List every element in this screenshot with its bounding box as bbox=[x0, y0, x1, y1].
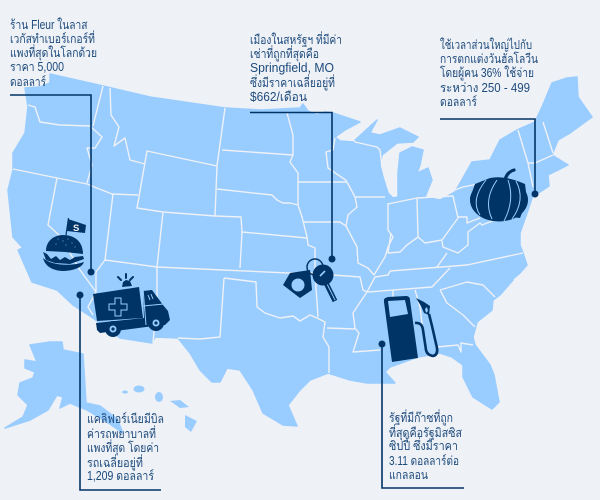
text: halloween fact: ระหว่าง 250 - 499 bbox=[440, 81, 530, 95]
text: gas fact: 3.11 ดอลลาร์ต่อ bbox=[389, 454, 459, 468]
text: halloween fact: การตกแต่งวันฮัลโลวีน bbox=[440, 51, 538, 66]
text: halloween fact: ใช้เวลาส่วนใหญ่ไปกับ bbox=[440, 38, 532, 52]
text: rent fact: Springfield, MO bbox=[250, 61, 334, 75]
text: burger fact: ดอลลาร์ bbox=[10, 75, 46, 89]
text: burger fact: เวกัสทำเบอร์เกอร์ที่ bbox=[10, 30, 95, 46]
text: ambulance fact: แคลิฟอร์เนียมีบิล bbox=[87, 412, 164, 426]
text: rent fact: เช่าที่ถูกที่สุดคือ bbox=[250, 45, 319, 62]
text: burger fact: ราคา 5,000 bbox=[10, 60, 64, 74]
alaska bbox=[5, 342, 123, 433]
text: burger fact: แพงที่สุดในโลกด้วย bbox=[10, 44, 97, 61]
text: burger fact: ร้าน Fleur ในลาส bbox=[10, 18, 88, 32]
text: rent fact: $662/เดือน bbox=[250, 90, 307, 104]
text: rent fact: เมืองในสหรัฐฯ ที่มีค่า bbox=[250, 31, 342, 47]
text: gas fact: รัฐที่มีก๊าซที่ถูก bbox=[389, 409, 453, 426]
text: gas fact: แกลลอน bbox=[389, 468, 428, 482]
text: gas fact: ที่สุดคือรัฐมิสซิส bbox=[389, 424, 462, 441]
text: ambulance fact: ค่ารถพยาบาลที่ bbox=[87, 425, 156, 441]
hawaii bbox=[122, 386, 197, 432]
text: ambulance fact: รถเฉลี่ยอยู่ที่ bbox=[87, 454, 143, 471]
text: rent fact: ซึ่งมีราคาเฉลี่ยอยู่ที่ bbox=[250, 74, 335, 91]
text: halloween fact: โดยผู้คน 36% ใช้จ่าย bbox=[440, 65, 534, 81]
text: ambulance fact: 1,209 ดอลลาร์ bbox=[87, 469, 154, 483]
icon: burger: S bbox=[73, 223, 79, 234]
state borders bbox=[13, 86, 553, 373]
text: halloween fact: ดอลลาร์ bbox=[440, 95, 477, 109]
text: gas fact: ซิปปี้ ซึ่งมีราคา bbox=[389, 436, 458, 453]
contiguous states landmass bbox=[8, 74, 592, 426]
text: ambulance fact: แพงที่สุด โดยค่า bbox=[87, 439, 159, 456]
